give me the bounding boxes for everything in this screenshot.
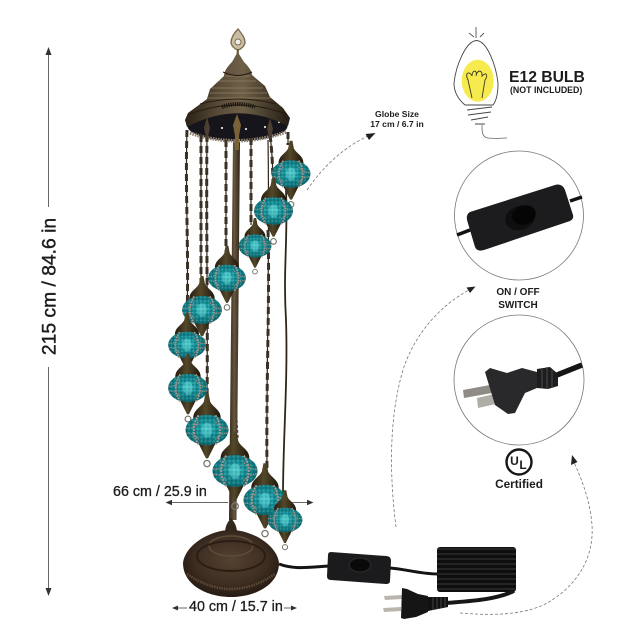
inline switch (327, 552, 391, 584)
switch label: SWITCH (498, 300, 538, 311)
globe 2 (254, 178, 293, 244)
globe 1 (272, 141, 310, 207)
UL certified badge: U (510, 454, 519, 468)
globe size text: Globe Size (375, 109, 419, 119)
globe 9 (212, 432, 258, 510)
icon: E12 bulb (454, 27, 507, 138)
switch callout arrow (392, 286, 476, 527)
UL certified badge: L (519, 458, 527, 472)
power cord with switch and plug (279, 547, 516, 619)
globe size callout: 17 cm / 6.7 in (370, 119, 424, 129)
globe 11 (268, 490, 302, 550)
globe 6 (168, 313, 206, 377)
plug callout arrow (460, 455, 592, 614)
globe 10 (243, 463, 287, 537)
hanging chains (186, 130, 288, 495)
cord coil (437, 547, 516, 592)
globe 7 (168, 354, 208, 422)
E12 bulb text (509, 69, 585, 95)
E12 bulb text: (NOT INCLUDED) (510, 85, 582, 95)
plug (383, 588, 448, 619)
label: 40 cm: 40 cm / 15.7 in (189, 599, 283, 615)
dome ornament drops (204, 114, 273, 150)
lamp stem (229, 140, 240, 520)
height label: 215 cm / 84.6 in (40, 218, 60, 355)
globe 4 (208, 246, 246, 310)
label: 66 cm: 66 cm / 25.9 in (113, 484, 207, 500)
switch label (496, 287, 540, 311)
floor lamp (168, 29, 310, 597)
cord to plug (446, 591, 514, 603)
switch label: ON / OFF (496, 287, 540, 298)
UL certified badge (495, 450, 543, 491)
dome underside (188, 111, 288, 141)
globe 5 (182, 276, 222, 344)
cord to switch (279, 564, 330, 568)
globe size callout (307, 109, 424, 190)
dome shade (185, 52, 290, 127)
finial (231, 29, 245, 54)
lamp base (183, 518, 279, 597)
height dimension arrow (40, 47, 60, 596)
globe 8 (185, 393, 229, 467)
base width dimension (172, 599, 297, 615)
E12 bulb text: E12 BULB (509, 69, 585, 86)
width dimension arrow: 66 cm (113, 484, 314, 505)
panel: plug (454, 315, 584, 445)
globe 3 (239, 218, 271, 274)
panel: on/off switch (454, 151, 584, 280)
certified text: Certified (495, 477, 543, 491)
